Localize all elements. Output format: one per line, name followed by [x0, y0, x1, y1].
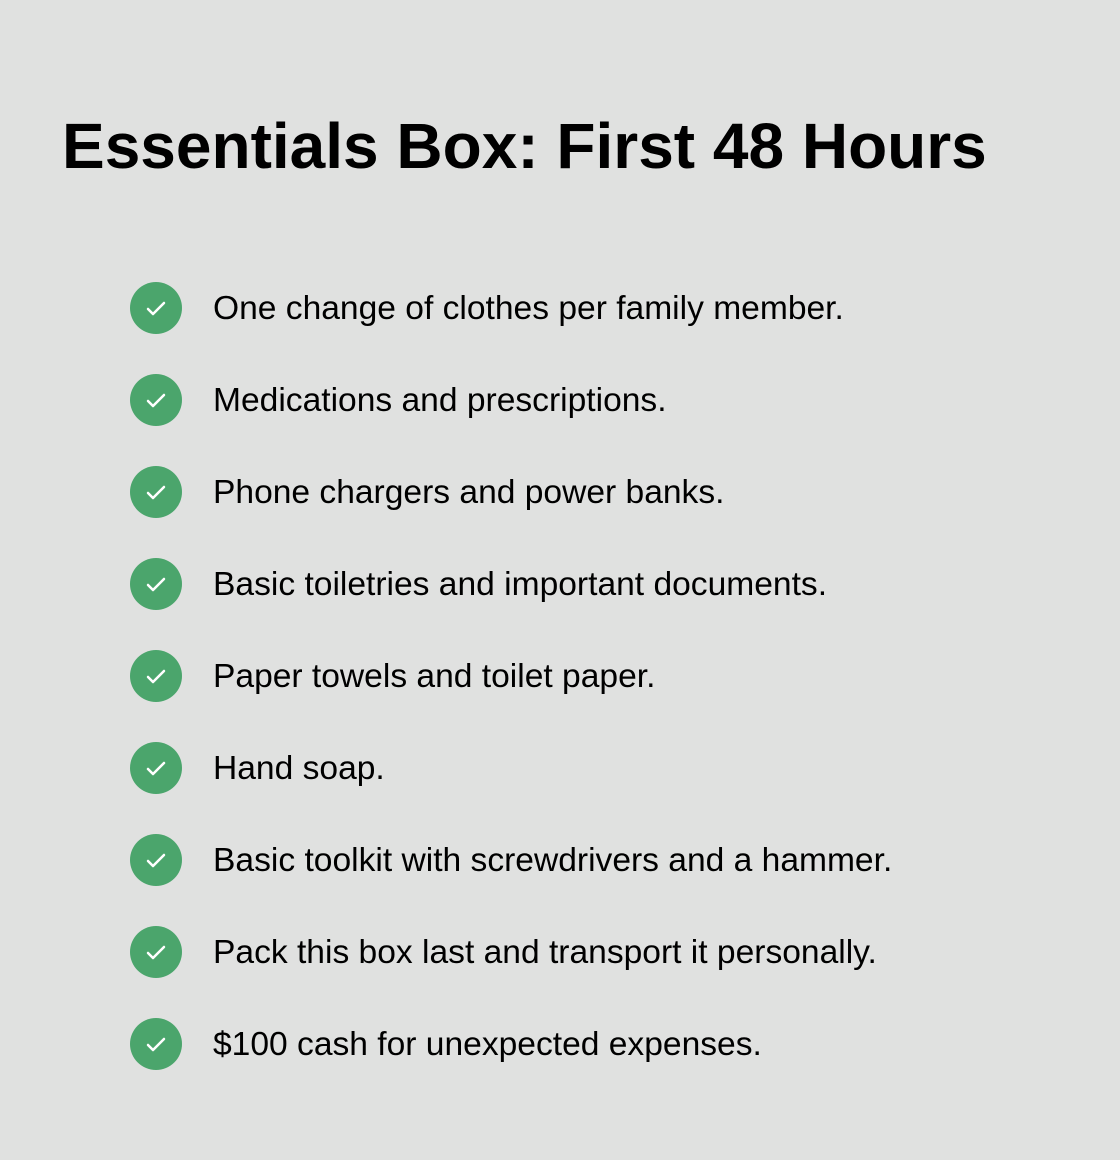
item 5: Paper towels and toilet paper.: [213, 658, 655, 695]
item 3: [130, 466, 724, 518]
item 4: [130, 558, 827, 610]
item 4: Basic toiletries and important documents.: [213, 566, 827, 603]
title: Essentials Box: First 48 Hours: [62, 110, 987, 182]
item 9: $100 cash for unexpected expenses.: [213, 1026, 762, 1063]
item 1: [130, 282, 844, 334]
item 7: Basic toolkit with screwdrivers and a hammer.: [213, 842, 892, 879]
item 6: Hand soap.: [213, 750, 385, 787]
item 9: [130, 1018, 762, 1070]
item 3: Phone chargers and power banks.: [213, 474, 724, 511]
item 7: [130, 834, 892, 886]
item 2: [130, 374, 667, 426]
item 8: Pack this box last and transport it personally.: [213, 934, 877, 971]
item 6: [130, 742, 385, 794]
item 1: One change of clothes per family member.: [213, 290, 844, 327]
item 8: [130, 926, 877, 978]
item 5: [130, 650, 655, 702]
item 2: Medications and prescriptions.: [213, 382, 667, 419]
